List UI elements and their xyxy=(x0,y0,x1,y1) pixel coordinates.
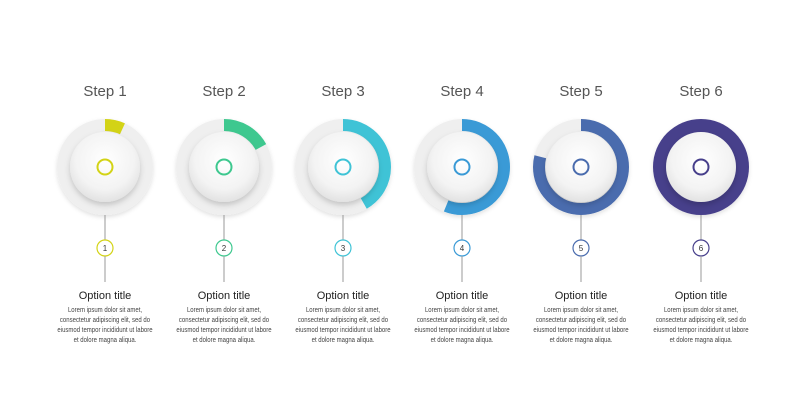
step 6: Step 6 xyxy=(679,83,723,100)
step 4: eiusmod tempor incididunt ut labore xyxy=(414,327,510,334)
step 1: eiusmod tempor incididunt ut labore xyxy=(57,327,153,334)
step 5: eiusmod tempor incididunt ut labore xyxy=(533,327,629,334)
step 4: Step 4 xyxy=(440,83,484,100)
step 3: Step 3 xyxy=(321,83,365,100)
step 1: Lorem ipsum dolor sit amet, xyxy=(68,307,142,314)
step 6 xyxy=(653,83,749,344)
step 3 xyxy=(295,83,391,344)
step 6: eiusmod tempor incididunt ut labore xyxy=(653,327,749,334)
step 6: Lorem ipsum dolor sit amet, xyxy=(664,307,738,314)
step 3: 3 xyxy=(341,244,346,253)
step 1: Step 1 xyxy=(83,83,127,100)
step 5: et dolore magna aliqua. xyxy=(550,337,613,344)
step 4: et dolore magna aliqua. xyxy=(431,337,494,344)
step 2: et dolore magna aliqua. xyxy=(193,337,256,344)
step 5: 5 xyxy=(579,244,584,253)
step 5: Option title xyxy=(555,290,607,302)
step 5: consectetur adipiscing elit, sed do xyxy=(536,317,626,324)
step 3: Option title xyxy=(317,290,369,302)
step 6: Option title xyxy=(675,290,727,302)
step 4 xyxy=(414,83,510,344)
step 6: et dolore magna aliqua. xyxy=(670,337,733,344)
step 4: Option title xyxy=(436,290,488,302)
step 2 xyxy=(176,83,272,344)
step 3: consectetur adipiscing elit, sed do xyxy=(298,317,388,324)
step 1: et dolore magna aliqua. xyxy=(74,337,137,344)
step 1: 1 xyxy=(103,244,108,253)
step 5 xyxy=(533,83,629,344)
step 2: Step 2 xyxy=(202,83,246,100)
step 3: eiusmod tempor incididunt ut labore xyxy=(295,327,391,334)
step 3: et dolore magna aliqua. xyxy=(312,337,375,344)
step 2: consectetur adipiscing elit, sed do xyxy=(179,317,269,324)
step 1: Option title xyxy=(79,290,131,302)
step 2: eiusmod tempor incididunt ut labore xyxy=(176,327,272,334)
step 5: Step 5 xyxy=(559,83,603,100)
step 3: Lorem ipsum dolor sit amet, xyxy=(306,307,380,314)
step 1 xyxy=(57,83,153,344)
step 2: Lorem ipsum dolor sit amet, xyxy=(187,307,261,314)
step 2: 2 xyxy=(222,244,227,253)
step 2: Option title xyxy=(198,290,250,302)
step 1: consectetur adipiscing elit, sed do xyxy=(60,317,150,324)
step 6: consectetur adipiscing elit, sed do xyxy=(656,317,746,324)
step 6: 6 xyxy=(699,244,704,253)
step 4: consectetur adipiscing elit, sed do xyxy=(417,317,507,324)
step 5: Lorem ipsum dolor sit amet, xyxy=(544,307,618,314)
step 4: Lorem ipsum dolor sit amet, xyxy=(425,307,499,314)
step 4: 4 xyxy=(460,244,465,253)
